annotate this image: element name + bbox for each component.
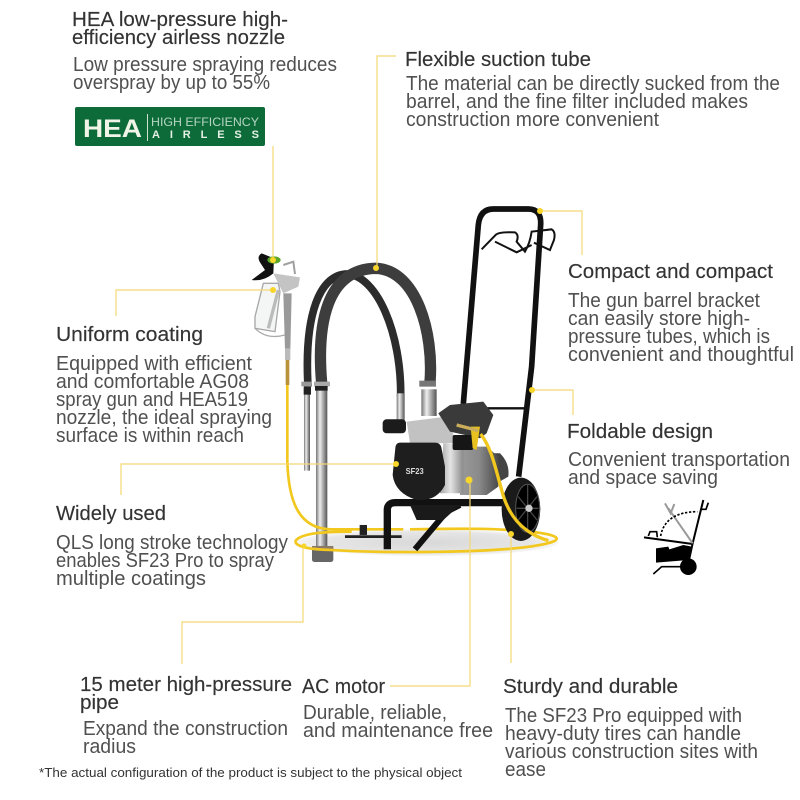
text: suction tube description: The material can be directly sucked from the (406, 73, 780, 95)
text: pipe description: Expand the construction (83, 718, 288, 740)
yellow hose ring (287, 385, 557, 552)
heading: Uniform coating: Uniform coating (56, 324, 203, 346)
text: uniform coating description: and comfortable AG08 (56, 371, 249, 393)
pump head and fittings (383, 381, 457, 443)
heading: Sturdy and durable: Sturdy and durable (503, 676, 678, 698)
text: uniform coating description (56, 353, 272, 447)
text: uniform coating description: spray gun and HEA519 (56, 389, 248, 411)
heading: AC motor: AC motor (302, 676, 385, 698)
HEA logo badge: AIRLESS (152, 129, 259, 141)
front pump cover (393, 443, 445, 500)
HEA logo badge (75, 107, 265, 146)
rear cover (438, 402, 493, 438)
suction tubes (301, 382, 333, 562)
text: pipe description: radius (83, 736, 136, 758)
text: suction tube description (406, 73, 780, 131)
text: widely used description: enables SF23 Pro to spray (56, 550, 274, 572)
heading: Flexible suction tube: Flexible suction tube (405, 49, 591, 71)
text: compact description: pressure tubes, which is (568, 326, 770, 348)
yellow outlet hose (481, 434, 548, 541)
text: sturdy description: ease (505, 759, 546, 781)
heading: Foldable design: Foldable design (567, 421, 713, 443)
heading: 15 meter pipe: 15 meter high-pressure (80, 674, 292, 696)
heading: Widely used: Widely used (56, 503, 166, 525)
motor body (440, 425, 509, 495)
text: foldable description: and space saving (568, 467, 718, 489)
text: AC motor description (303, 702, 493, 742)
cart handle frame (463, 209, 555, 477)
text: widely used description: QLS long stroke technology (56, 532, 288, 554)
heading: HEA nozzle: efficiency airless nozzle (72, 27, 285, 49)
text: compact description: convenient and thoughtful (568, 344, 794, 366)
heading: HEA nozzle (72, 9, 288, 49)
text: sturdy description: various construction sites with (505, 741, 758, 763)
callout dots (270, 208, 543, 548)
text: compact description: can easily store high- (568, 308, 750, 330)
front pump cover: SF23 (406, 466, 424, 476)
text: widely used description (56, 532, 288, 590)
HEA logo badge: HIGH EFFICIENCY (151, 115, 259, 129)
text: foldable description (568, 449, 790, 489)
heading: HEA nozzle: HEA low-pressure high- (72, 9, 288, 31)
text: compact description (568, 290, 794, 366)
text: HEA nozzle description: Low pressure spraying reduces (73, 54, 337, 76)
heading: 15 meter pipe (80, 674, 292, 714)
suction hoses (307, 268, 431, 397)
text: uniform coating description: Equipped with efficient (56, 353, 252, 375)
text: suction tube description: barrel, and the fine filter included makes (406, 91, 748, 113)
text: AC motor description: Durable, reliable, (303, 702, 447, 724)
text: sturdy description (505, 705, 758, 781)
spray gun (252, 253, 300, 385)
heading: Compact and compact: Compact and compact (568, 261, 773, 283)
product: airless sprayer (252, 209, 558, 562)
text: uniform coating description: surface is within reach (56, 425, 244, 447)
floor shadow (295, 529, 558, 556)
text: sturdy description: heavy-duty tires can handle (505, 723, 741, 745)
text: foldable description: Convenient transportation (568, 449, 790, 471)
footnote: *The actual configuration of the product is subject to the physical object (39, 765, 462, 780)
wheel (502, 478, 540, 541)
text: AC motor description: and maintenance free (303, 720, 493, 742)
text: uniform coating description: nozzle, the ideal spraying (56, 407, 272, 429)
text: sturdy description: The SF23 Pro equipped with (505, 705, 742, 727)
icon: folding cart (644, 500, 708, 575)
leader lines (116, 56, 582, 686)
text: suction tube description: construction more convenient (406, 109, 659, 131)
base frame (345, 503, 503, 549)
text: compact description: The gun barrel bracket (568, 290, 760, 312)
text: HEA nozzle description (73, 54, 337, 94)
heading: 15 meter pipe: pipe (80, 692, 119, 714)
text: HEA nozzle description: overspray by up to 55% (73, 72, 270, 94)
text: widely used description: multiple coatings (56, 568, 206, 590)
text: pipe description (83, 718, 288, 758)
HEA logo badge: HEA (83, 115, 142, 143)
